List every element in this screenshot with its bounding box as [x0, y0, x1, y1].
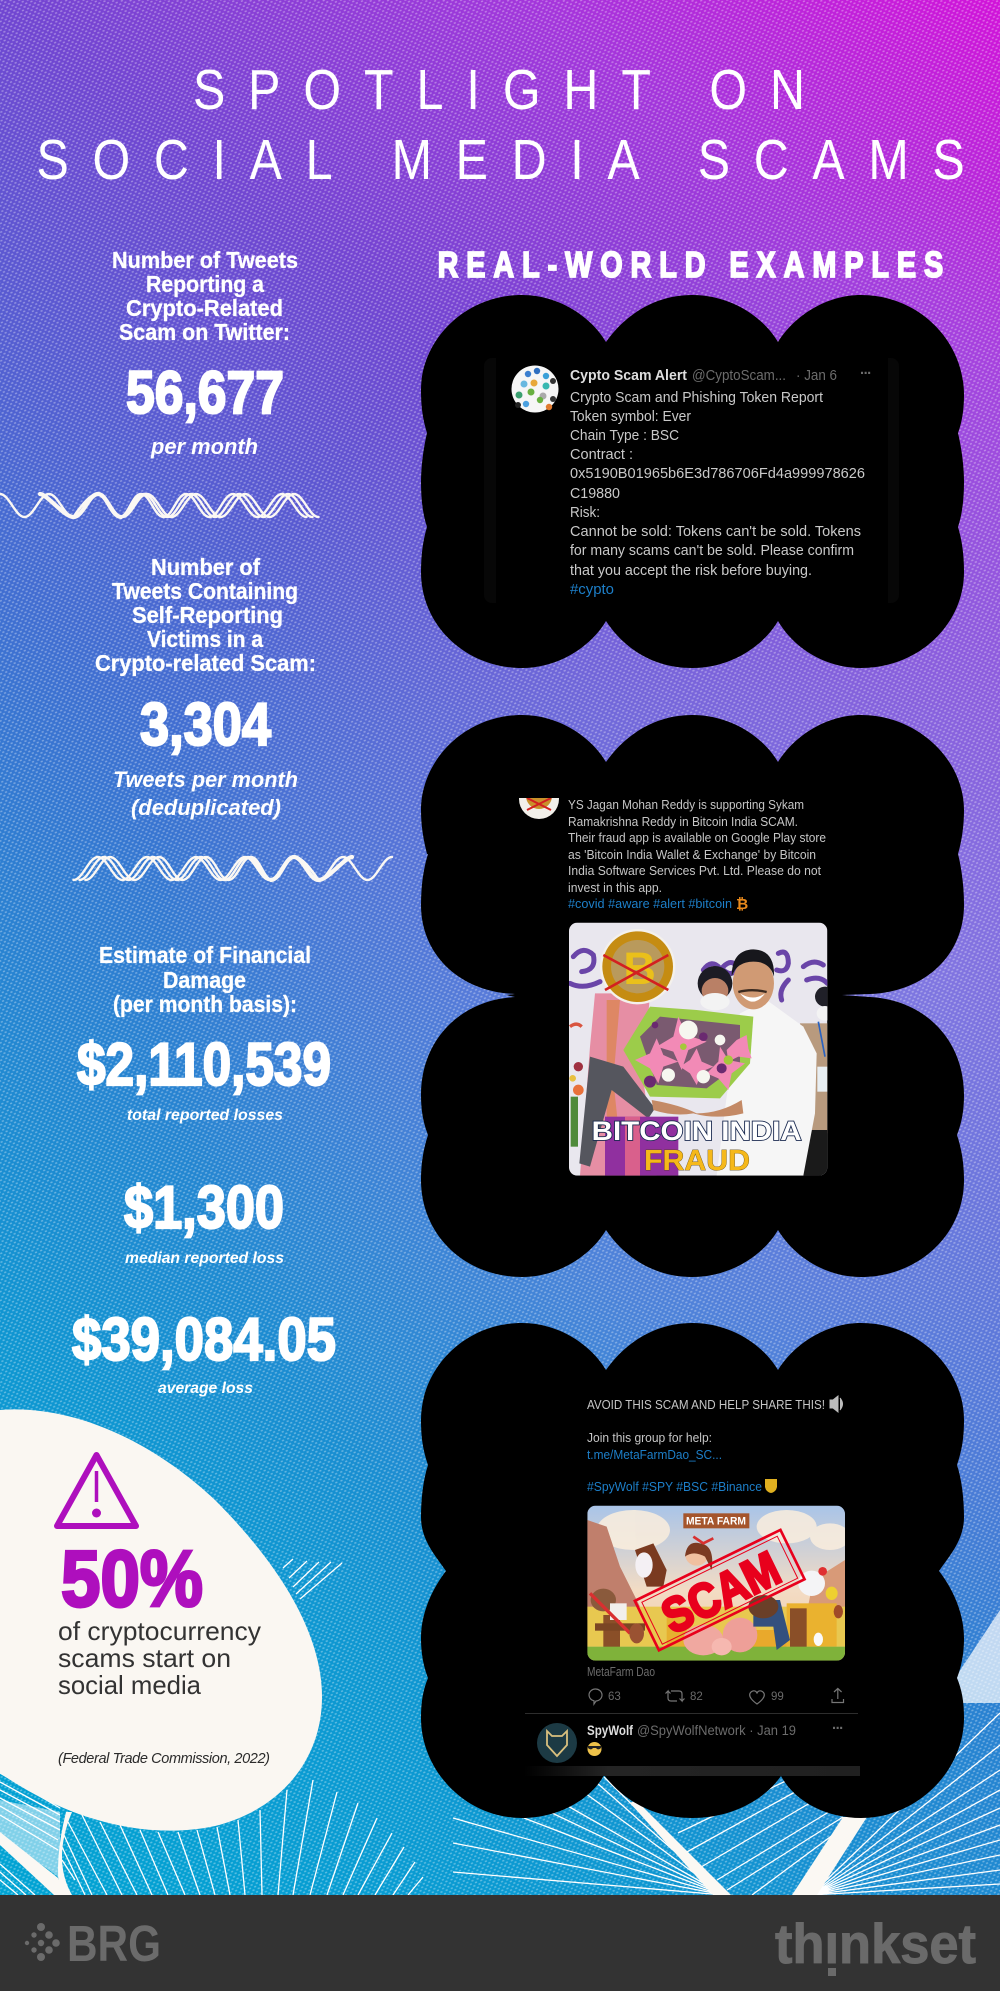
stat: tweets reporting a scam: Number of Tweets [112, 247, 298, 273]
big percent: 50% [61, 1534, 203, 1623]
panel: example tweet 2 [421, 715, 964, 1277]
tweet 1 body: Contract : [570, 447, 633, 463]
tweet 3 body: Join this group for help: [587, 1430, 712, 1445]
tweet 1 body: Crypto Scam and Phishing Token Report [570, 390, 823, 406]
tweet 2 body: invest in this app. [568, 880, 662, 895]
tweet 1 header: ··· [860, 366, 872, 382]
card caption: MetaFarm Dao [587, 1664, 655, 1679]
tweet 2 body: as 'Bitcoin India Wallet & Exchange' by Bitcoin [568, 847, 816, 862]
tweet 2 body: #covid #aware #alert #bitcoin [568, 896, 732, 911]
callout text: scams start on [58, 1643, 231, 1673]
tweet 3 body: #SpyWolf #SPY #BSC #Binance [587, 1479, 762, 1494]
tweet 1 body [570, 390, 865, 598]
callout text: of cryptocurrency [58, 1616, 261, 1646]
purple script backdrop [570, 950, 827, 1000]
title [37, 58, 965, 192]
scam stamp: SCAM [654, 1541, 789, 1644]
side flowers [573, 1085, 584, 1095]
man in white shirt [717, 1000, 817, 1176]
panel: example tweet 1 [421, 295, 964, 668]
tweet 1 header: Cypto Scam Alert [570, 368, 687, 384]
wave divider 1 [0, 494, 318, 517]
decorative ray fans [0, 1559, 1000, 1895]
stat: self-reporting victims: Tweets Containing [112, 578, 298, 604]
photo: bitcoin india fraud: FRAUD [644, 1145, 750, 1177]
bitcoin india coin [600, 929, 675, 1004]
photo caption: BITCOIN INDIA [592, 1116, 802, 1146]
stat: self-reporting victims [95, 554, 316, 820]
stat: self-reporting victims: Victims in a [147, 626, 263, 652]
callout background blob [0, 1409, 322, 1831]
cloud shape 1 [421, 295, 964, 668]
emoji [588, 1742, 602, 1756]
stat: self-reporting victims: (deduplicated) [131, 795, 281, 820]
tweet 2 body: Ramakrishna Reddy in Bitcoin India SCAM. [568, 814, 798, 829]
tweet 1 body: that you accept the risk before buying. [570, 563, 812, 579]
stat: estimate of financial damage: $39,084.05 [72, 1306, 336, 1373]
stat: estimate of financial damage: total reported losses [127, 1107, 283, 1124]
bouquet [623, 1007, 753, 1098]
logo: thinkset: thınkset [775, 1912, 976, 1975]
avatar [519, 798, 559, 819]
tweet 1 body: Cannot be sold: Tokens can't be sold. Tokens [570, 524, 861, 540]
stat: estimate of financial damage: Damage [163, 967, 246, 993]
tweet 1 header: · Jan 6 [796, 368, 837, 384]
stat: self-reporting victims: Tweets per month [113, 767, 298, 792]
hands [652, 1100, 743, 1117]
tweet 1 body: Risk: [570, 505, 600, 521]
title: SOCIAL MEDIA SCAMS [37, 128, 965, 192]
reply header [587, 1721, 844, 1738]
stat: estimate of financial damage: average loss [158, 1380, 253, 1397]
left figure [580, 993, 657, 1176]
logo dots [25, 1923, 60, 1961]
tweet action counts [608, 1691, 784, 1703]
avatar [512, 366, 558, 412]
clouds [597, 1510, 850, 1550]
reply header: @SpyWolfNetwork · Jan 19 [637, 1723, 796, 1738]
stat: tweets reporting a scam [112, 247, 298, 459]
source: (Federal Trade Commission, 2022) [58, 1751, 270, 1767]
stat: estimate of financial damage: $2,110,539 [77, 1031, 331, 1098]
reply header: SpyWolf [587, 1723, 633, 1738]
tweet 1 body: C19880 [570, 486, 620, 502]
tweet 2 body: India Software Services Pvt. Ltd. Please do not [568, 863, 821, 878]
tweet 3 body [587, 1396, 842, 1494]
reply avatar [537, 1723, 577, 1763]
tweet 3 body: AVOID THIS SCAM AND HELP SHARE THIS! [587, 1397, 825, 1412]
icon: warning triangle [57, 1455, 136, 1526]
heading: real-world examples: REAL-WORLD EXAMPLES [438, 244, 943, 285]
tweet action counts: 82 [690, 1691, 703, 1703]
panel: example tweet 3 [421, 1323, 964, 1818]
tweet 3 body: t.me/MetaFarmDao_SC... [587, 1447, 722, 1462]
footer bar [0, 1895, 1000, 1991]
hay and ground [587, 1607, 845, 1647]
stat: self-reporting victims: 3,304 [140, 691, 272, 758]
tweet 1 body: Chain Type : BSC [570, 428, 679, 444]
tweet 2 body: ₿ [736, 896, 748, 913]
tweet 1 body: for many scams can't be sold. Please confirm [570, 543, 854, 559]
cloud shape 2 [421, 715, 964, 1277]
cloud shape 3 [421, 1323, 964, 1818]
characters [635, 1543, 667, 1587]
stat: tweets reporting a scam: per month [150, 434, 258, 459]
tweet action counts: 99 [771, 1691, 784, 1703]
logo: BRG [25, 1915, 161, 1972]
title: SPOTLIGHT ON [193, 58, 805, 122]
tweet 2 body: YS Jagan Mohan Reddy is supporting Sykam [568, 797, 804, 812]
stat: estimate of financial damage: (per month basis): [113, 991, 297, 1017]
stat: estimate of financial damage: Estimate of Financial [99, 942, 311, 968]
callout text: social media [58, 1670, 202, 1700]
tweet 1 body: Token symbol: Ever [570, 409, 691, 425]
stat: tweets reporting a scam: Reporting a [146, 271, 264, 297]
tweet 2 body: Their fraud app is available on Google Play store [568, 830, 826, 845]
tweet 1 header: @CyptoScam... [692, 368, 786, 384]
stat: self-reporting victims: Self-Reporting [132, 602, 283, 628]
stat: self-reporting victims: Number of [151, 554, 260, 580]
callout: 50 percent [0, 1409, 322, 1831]
meta farm sign [683, 1513, 749, 1528]
logo: BRG: BRG [67, 1915, 161, 1972]
photo: meta farm scam [587, 1506, 850, 1661]
stat: self-reporting victims: Crypto-related Scam: [95, 650, 316, 676]
tweet actions [589, 1688, 844, 1704]
photo: bitcoin india fraud: B [623, 943, 656, 994]
tweet 1 body: #cypto [570, 582, 614, 598]
callout text [58, 1616, 261, 1700]
background people [800, 1023, 827, 1133]
tweet 1 header [570, 366, 872, 384]
stat: tweets reporting a scam: 56,677 [126, 359, 284, 426]
tweet action counts: 63 [608, 1691, 621, 1703]
stat: tweets reporting a scam: Scam on Twitter: [119, 319, 290, 345]
photo: bitcoin india fraud [569, 923, 835, 1177]
wave divider 2 [74, 857, 392, 880]
rock [587, 1520, 643, 1620]
stat: estimate of financial damage: $1,300 [124, 1174, 284, 1241]
tweet 2 body [568, 797, 826, 913]
photo: meta farm scam: META FARM [686, 1516, 746, 1528]
stat: estimate of financial damage [72, 942, 336, 1397]
tweet 1 body: 0x5190B01965b6E3d786706Fd4a999978626 [570, 466, 865, 482]
stat: tweets reporting a scam: Crypto-Related [126, 295, 283, 321]
reply header: ··· [832, 1721, 844, 1737]
stat: estimate of financial damage: median reported loss [125, 1250, 284, 1267]
